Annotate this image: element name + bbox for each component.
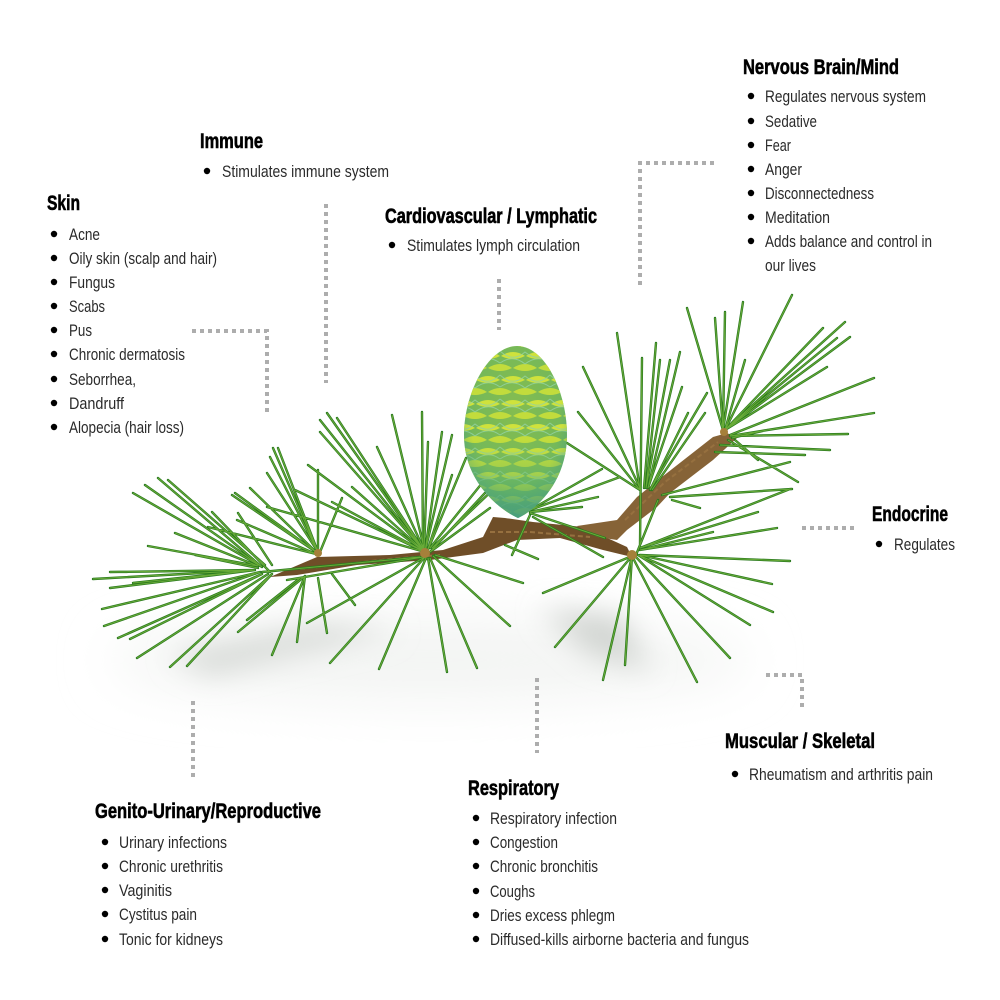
list: Chronic bronchitis xyxy=(490,857,598,876)
list: Adds balance and control in xyxy=(765,232,932,251)
green cone xyxy=(464,346,567,518)
list: Stimulates lymph circulation xyxy=(407,236,580,255)
panel: respiratory xyxy=(468,777,749,949)
list xyxy=(51,225,217,437)
list: Dandruff xyxy=(69,394,124,413)
list: Diffused-kills airborne bacteria and fungus xyxy=(490,930,749,949)
list: Urinary infections xyxy=(119,833,227,852)
heading: Cardiovascular / Lymphatic xyxy=(385,205,597,228)
list xyxy=(473,809,749,949)
shadow under branch xyxy=(110,610,750,700)
list: Alopecia (hair loss) xyxy=(69,418,184,437)
heading: Nervous Brain/Mind xyxy=(743,56,899,79)
list: Chronic urethritis xyxy=(119,857,223,876)
panel: nervous brain/mind xyxy=(743,56,932,275)
connector: genito-urinary xyxy=(191,701,195,781)
panel: skin xyxy=(47,192,217,437)
list: Chronic dermatosis xyxy=(69,345,185,364)
connector: muscular xyxy=(766,675,802,711)
panel: immune xyxy=(200,130,389,181)
list: Rheumatism and arthritis pain xyxy=(749,765,933,784)
list: Scabs xyxy=(69,297,105,316)
panel: cardiovascular / lymphatic xyxy=(385,205,597,255)
needle cluster bases xyxy=(314,428,728,560)
list: Anger xyxy=(765,160,802,179)
list: Fear xyxy=(765,136,791,155)
list: Stimulates immune system xyxy=(222,162,389,181)
list: Tonic for kidneys xyxy=(119,930,223,949)
list: Fungus xyxy=(69,273,115,292)
list: Pus xyxy=(69,321,92,340)
heading: Endocrine xyxy=(872,503,948,526)
list: Regulates nervous system xyxy=(765,87,926,106)
panel: endocrine xyxy=(872,503,955,554)
list: Seborrhea, xyxy=(69,370,136,389)
list xyxy=(102,833,227,949)
heading: Skin xyxy=(47,192,80,215)
connector: nervous xyxy=(640,163,714,285)
list: Dries excess phlegm xyxy=(490,906,615,925)
list: Vaginitis xyxy=(119,881,172,900)
connector: endocrine xyxy=(802,526,854,530)
heading: Muscular / Skeletal xyxy=(725,730,875,753)
pine needles xyxy=(93,295,874,682)
list: Cystitus pain xyxy=(119,905,197,924)
list: Respiratory infection xyxy=(490,809,617,828)
list: Sedative xyxy=(765,112,817,131)
list: Meditation xyxy=(765,208,830,227)
list: Congestion xyxy=(490,833,558,852)
list: Coughs xyxy=(490,882,535,901)
heading: Respiratory xyxy=(468,777,559,800)
list: Disconnectedness xyxy=(765,184,874,203)
branch stem xyxy=(270,433,737,577)
list xyxy=(748,87,932,275)
list: Acne xyxy=(69,225,100,244)
connector: skin xyxy=(192,331,267,413)
list: our lives xyxy=(765,256,816,275)
list: Regulates xyxy=(894,535,955,554)
cedar branch illustration xyxy=(93,295,874,682)
list: Oily skin (scalp and hair) xyxy=(69,249,217,268)
connector: immune xyxy=(324,204,328,383)
heading: Immune xyxy=(200,130,263,153)
panel: genito-urinary/reproductive xyxy=(95,800,321,949)
connector: cardiovascular xyxy=(497,279,501,330)
connector: respiratory xyxy=(535,678,539,753)
panel: muscular / skeletal xyxy=(725,730,933,784)
heading: Genito-Urinary/Reproductive xyxy=(95,800,321,823)
